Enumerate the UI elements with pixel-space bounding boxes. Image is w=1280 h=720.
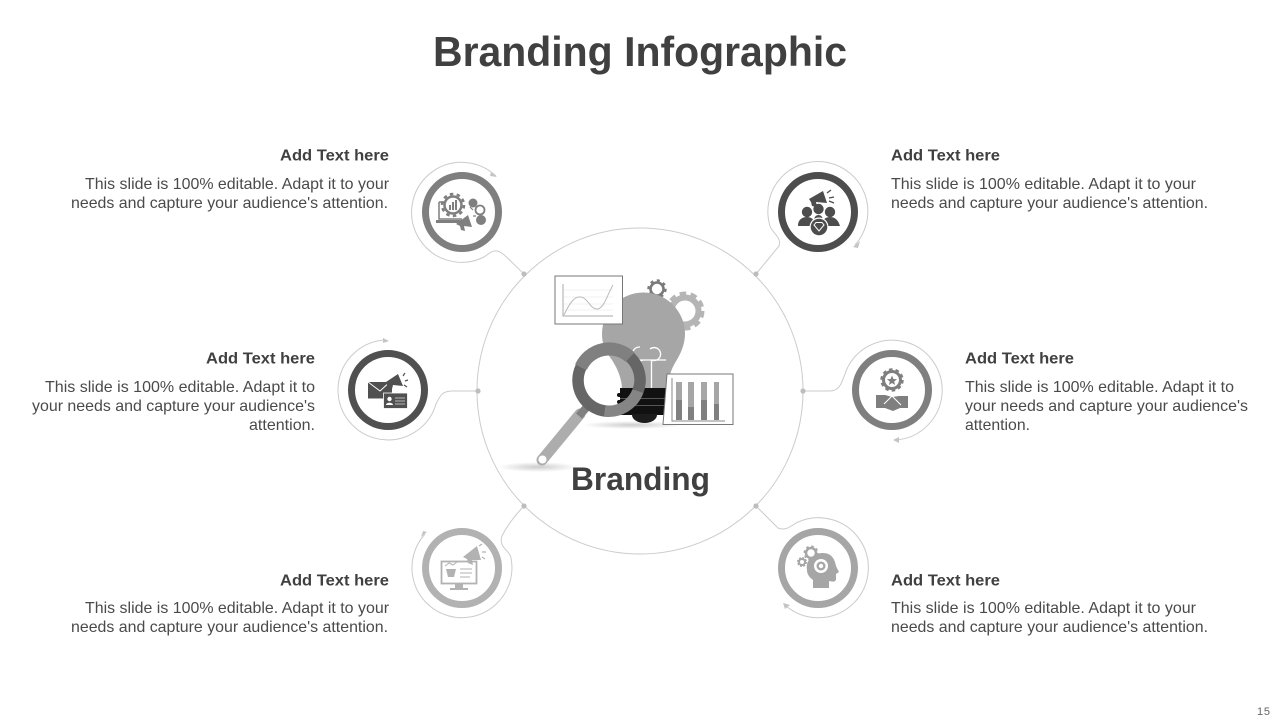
text block: middle right <box>965 350 1248 434</box>
connector with arrow <box>338 338 481 440</box>
icon: award badge and handshake <box>876 370 908 411</box>
connector with arrow <box>800 340 942 443</box>
panel: middle right node <box>800 340 942 443</box>
text block: bottom right: Add Text here <box>891 572 1000 590</box>
text block: middle right: This slide is 100% editable. Adapt it to <box>965 379 1234 396</box>
icon: magnifying glass <box>538 349 640 464</box>
panel: middle left node <box>338 338 481 440</box>
text block: top right: needs and capture your audience's attention. <box>891 195 1208 212</box>
ring <box>856 354 928 426</box>
text block: middle right: your needs and capture your audience's <box>965 398 1248 415</box>
text block: top left: This slide is 100% editable. Adapt it to your <box>85 176 390 193</box>
icon: monitor with basket and megaphone <box>442 544 486 590</box>
text block: top left: needs and capture your audience's attention. <box>71 195 388 212</box>
panel: bottom left node <box>412 503 527 618</box>
text block: top right: Add Text here <box>891 148 1000 164</box>
connector with arrow <box>753 503 868 618</box>
icon: bar chart card <box>663 374 733 424</box>
text block: bottom left: needs and capture your audience's attention. <box>71 619 388 636</box>
connector with arrow <box>412 503 527 618</box>
ring <box>352 354 424 426</box>
central illustration: bulb, magnifier and charts <box>498 276 733 472</box>
ring <box>426 532 498 604</box>
icon: large gear <box>668 294 702 328</box>
icon: light bulb <box>602 292 685 423</box>
ring <box>782 176 854 248</box>
icon: audience with megaphone and diamond <box>798 190 840 236</box>
panel: bottom right node <box>753 503 868 618</box>
connector with arrow <box>412 162 527 277</box>
central label: Branding <box>571 461 710 497</box>
text block: bottom left: Add Text here <box>280 572 389 590</box>
panel: top right node <box>753 162 868 277</box>
ring <box>426 176 498 248</box>
text block: top left: Add Text here <box>280 148 389 164</box>
text block: middle left: Add Text here <box>206 350 315 368</box>
central circle <box>477 228 803 554</box>
text block: top right <box>891 148 1208 212</box>
connector with arrow <box>753 162 868 277</box>
shadows <box>498 421 682 472</box>
text block: bottom right: needs and capture your audience's attention. <box>891 619 1208 636</box>
icon: line chart card <box>555 276 622 324</box>
panel: top left node <box>412 162 527 277</box>
icon: envelope, megaphone and ID card <box>368 373 408 408</box>
text block: middle right: Add Text here <box>965 350 1074 368</box>
icon: head with gears <box>798 546 839 588</box>
text block: middle left: your needs and capture your audience's <box>32 398 315 415</box>
text block: middle right: attention. <box>965 417 1030 434</box>
text block: bottom right: This slide is 100% editable. Adapt it to your <box>891 600 1197 617</box>
lens donut <box>578 349 640 411</box>
text block: bottom left <box>71 572 390 636</box>
text block: middle left: attention. <box>249 417 315 434</box>
ring <box>782 532 854 604</box>
title: Branding Infographic <box>433 28 847 75</box>
text block: top right: This slide is 100% editable. Adapt it to your <box>891 176 1197 193</box>
text block: top left <box>71 148 390 212</box>
icon: small gear <box>648 280 666 298</box>
text block: middle left <box>32 350 315 434</box>
icon: laptop, gear and social <box>436 194 486 231</box>
text block: middle left: This slide is 100% editable. Adapt it to <box>45 379 315 396</box>
text block: bottom left: This slide is 100% editable. Adapt it to your <box>85 600 390 617</box>
page number: 15 <box>1257 706 1270 718</box>
text block: bottom right <box>891 572 1208 636</box>
handle <box>538 408 586 464</box>
